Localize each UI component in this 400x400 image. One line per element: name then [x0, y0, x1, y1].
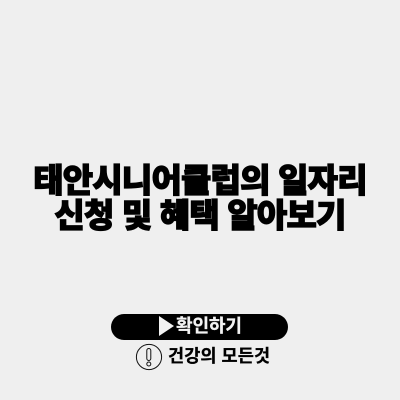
icon: exclamation circle [136, 344, 162, 370]
button label: 확인하기 [176, 316, 242, 336]
title: 신청 및 혜택 알아보기 [54, 197, 346, 234]
brand name: 건강의 모든것 [168, 346, 270, 366]
button icon: play triangle [159, 316, 174, 336]
title [33, 162, 367, 234]
button: confirm [111, 314, 288, 340]
title: 태안시니어클럽의 일자리 [33, 162, 367, 199]
brand: health logo [136, 344, 270, 370]
